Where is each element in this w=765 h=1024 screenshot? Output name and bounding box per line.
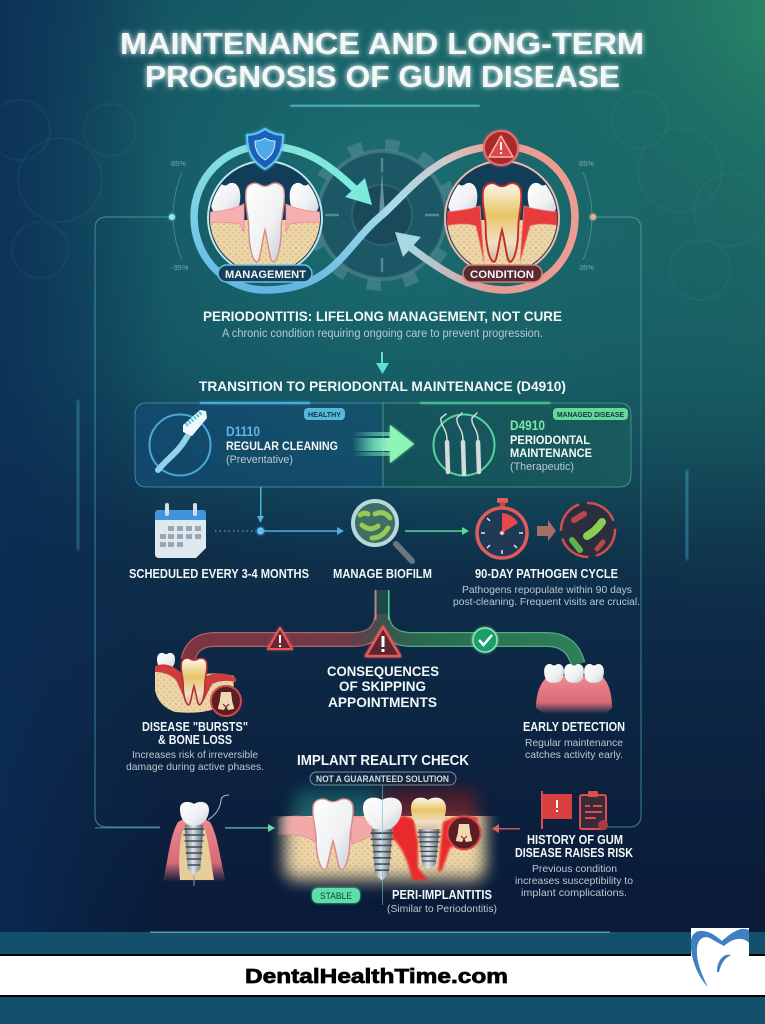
icon: large warning: [366, 627, 400, 656]
heading: consequences of skipping appointments: CONSEQUENCES: [327, 663, 439, 679]
text: D4910: MAINTENANCE: [510, 446, 592, 460]
heading: transition: TRANSITION TO PERIODONTAL MAINTENANCE (D4910): [199, 378, 566, 394]
infinity cycle diagram: [171, 129, 594, 290]
text: D4910: D4910: [510, 417, 545, 433]
red ribbon arrow: [395, 146, 575, 290]
label: schedule: SCHEDULED EVERY 3-4 MONTHS: [129, 567, 309, 581]
text: D1110: (Preventative): [226, 454, 293, 466]
text block: peri-implantitis: [387, 888, 497, 915]
centre divider: [382, 785, 383, 905]
title: PROGNOSIS OF GUM DISEASE: [145, 59, 620, 94]
text block: history of gum disease: implant complications.: [521, 887, 627, 899]
text block: history of gum disease: DISEASE RAISES RISK: [515, 846, 633, 860]
icon: bone: [448, 816, 480, 850]
tag: stable: STABLE: [320, 891, 352, 901]
label: condition: CONDITION: [470, 269, 534, 281]
arrow: down to transition: [376, 352, 389, 374]
icon: logo tooth: [691, 928, 749, 987]
text block: early detection: EARLY DETECTION: [523, 720, 625, 734]
connector: left line to implant scene: [95, 824, 275, 832]
text block: history of gum disease: Previous condition: [532, 863, 617, 875]
panel: diseased tooth circle: [444, 161, 560, 265]
icon: scaler tools: [434, 413, 494, 476]
icon: magnifier biofilm: [353, 501, 412, 561]
branch: split into consequences and early detection: [188, 590, 578, 664]
blue ribbon arrow: [194, 146, 502, 290]
failing implant: [411, 798, 446, 869]
text block: disease bursts: [126, 720, 264, 773]
panel: healthy tooth circle: [207, 161, 323, 264]
text block: peri-implantitis: (Similar to Periodontitis): [387, 903, 497, 915]
label: manage biofilm: MANAGE BIOFILM: [333, 567, 432, 581]
outer flow frame: [95, 214, 641, 827]
tag: not a guaranteed solution: NOT A GUARANTEED SOLUTION: [316, 774, 449, 784]
text block: disease bursts: Increases risk of irreversible: [132, 749, 258, 761]
small statistic marks: 85%: [171, 159, 186, 168]
panel: D1110 vs D4910 comparison card: [135, 402, 631, 487]
small statistic marks: -35%: [171, 263, 189, 272]
illustration: healthy gum and teeth: [536, 664, 612, 714]
icon: bacteria cycle: [561, 503, 615, 557]
text block: disease bursts: damage during active phases.: [126, 761, 264, 773]
text: chronic condition: A chronic condition requiring ongoing care to prevent progression.: [222, 328, 543, 340]
icon: toothbrush: [150, 410, 210, 476]
tag: managed disease: [553, 408, 628, 420]
text block: history of gum disease: HISTORY OF GUM: [527, 833, 623, 847]
illustration: tooth with bone loss: [155, 653, 241, 716]
text block: early detection: Regular maintenance: [525, 737, 623, 749]
text block: pathogen cycle: 90-DAY PATHOGEN CYCLE: [475, 567, 618, 581]
text block: pathogen cycle: Pathogens repopulate within 90 days: [462, 584, 632, 596]
heading: implant reality check: IMPLANT REALITY CHECK: [297, 752, 469, 769]
connector: biofilm to stopwatch: [405, 527, 469, 535]
title: MAINTENANCE AND LONG-TERM: [120, 26, 644, 61]
icon: clipboard: [580, 791, 608, 830]
text block: history of gum disease: increases susceptibility to: [515, 875, 633, 887]
illustration: single implant: [163, 795, 229, 886]
illustration: implant comparison scene: [270, 785, 500, 905]
divider arrow: [352, 425, 414, 463]
icon: check: [473, 628, 497, 652]
text block: early detection: catches activity early.: [525, 749, 623, 761]
text: D1110: D1110: [226, 423, 260, 439]
website url: DentalHealthTime.com: [245, 966, 508, 988]
text block: pathogen cycle: post-cleaning. Frequent visits are crucial.: [453, 596, 640, 608]
footer band: [0, 928, 765, 1024]
text block: disease bursts: & BONE LOSS: [158, 733, 232, 747]
icon: warning circle: [484, 131, 518, 165]
text: D1110: [226, 423, 338, 466]
heading: consequences of skipping appointments: APPOINTMENTS: [328, 694, 437, 710]
tag: healthy: HEALTHY: [308, 410, 341, 419]
arrow: history to implant: [492, 824, 520, 833]
icon: calendar: [155, 503, 206, 558]
heading: consequences of skipping appointments: OF SKIPPING: [339, 678, 426, 694]
title underline glow: [290, 105, 480, 106]
label: management: MANAGEMENT: [225, 269, 306, 281]
small statistic marks: 35%: [579, 263, 594, 272]
icon: stopwatch: [477, 498, 527, 558]
tag: stable: [312, 888, 360, 903]
text block: disease bursts: DISEASE "BURSTS": [142, 720, 248, 734]
small statistic marks: 85%: [579, 159, 594, 168]
text block: history of gum disease: [515, 833, 633, 899]
arrow: stopwatch to bacteria: [537, 520, 556, 541]
text block: pathogen cycle: [453, 567, 640, 608]
gear in centre: [312, 145, 452, 285]
tag: managed disease: MANAGED DISEASE: [557, 410, 624, 419]
text block: early detection: [523, 720, 625, 761]
text: D1110: REGULAR CLEANING: [226, 439, 338, 453]
icon: red flag: [541, 791, 572, 829]
title: [120, 26, 644, 94]
text: D4910: PERIODONTAL: [510, 433, 590, 447]
connector: card to schedule row: [215, 487, 344, 535]
tag: healthy: [304, 408, 345, 420]
heading: consequences of skipping appointments: [327, 663, 439, 710]
text block: peri-implantitis: PERI-IMPLANTITIS: [392, 888, 492, 902]
icon: small warning: [268, 628, 292, 649]
label: condition: [463, 265, 542, 282]
icon: shield: [247, 129, 283, 169]
small statistic marks: [171, 159, 594, 272]
heading: lifelong management: PERIODONTITIS: LIFELONG MANAGEMENT, NOT CURE: [203, 308, 562, 324]
text: D4910: [510, 417, 592, 473]
natural tooth: [313, 799, 353, 870]
label: management: [218, 265, 312, 282]
stable implant: [363, 798, 402, 880]
text: D4910: (Therapeutic): [510, 461, 574, 473]
